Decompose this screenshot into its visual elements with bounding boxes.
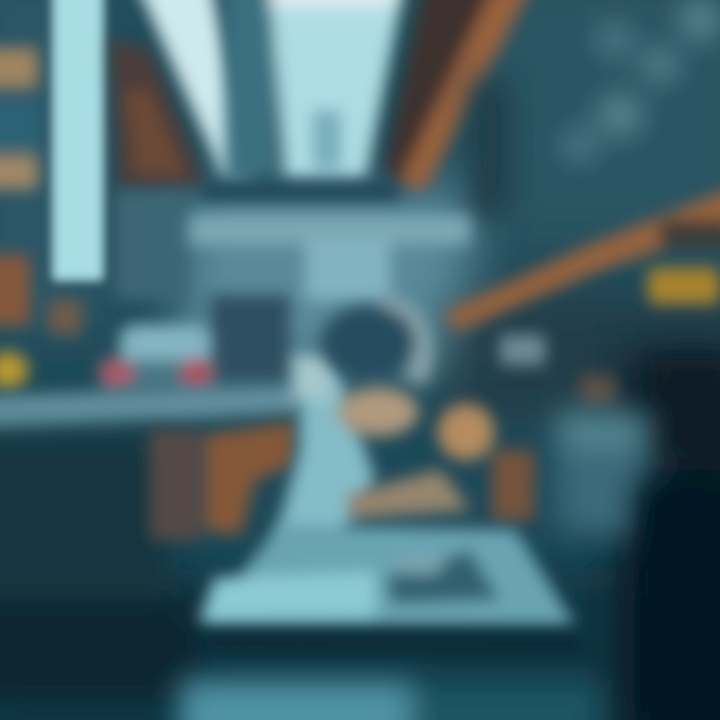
car body with red lights — [0, 325, 215, 392]
central band and reflections — [115, 180, 470, 380]
table surface — [200, 525, 575, 625]
white diagonal strip — [135, 0, 250, 180]
pale central path — [275, 355, 375, 540]
black right foreground — [635, 360, 720, 720]
left column with orange bands — [0, 48, 82, 334]
floor reflection — [180, 680, 600, 720]
dark foreground block left — [0, 435, 200, 700]
warm objects — [338, 335, 615, 520]
right block — [555, 410, 695, 540]
brown orange beam — [385, 0, 535, 190]
brown triangle upper left — [110, 40, 205, 190]
light vertical strip — [53, 0, 103, 280]
horizontal ledge left — [0, 385, 300, 430]
mottled right wall — [470, 0, 720, 220]
table edge shadow — [200, 630, 590, 655]
orange beam right — [445, 185, 720, 332]
wood panels — [150, 422, 295, 540]
round lens shape — [320, 295, 433, 385]
central skylight — [225, 0, 405, 180]
